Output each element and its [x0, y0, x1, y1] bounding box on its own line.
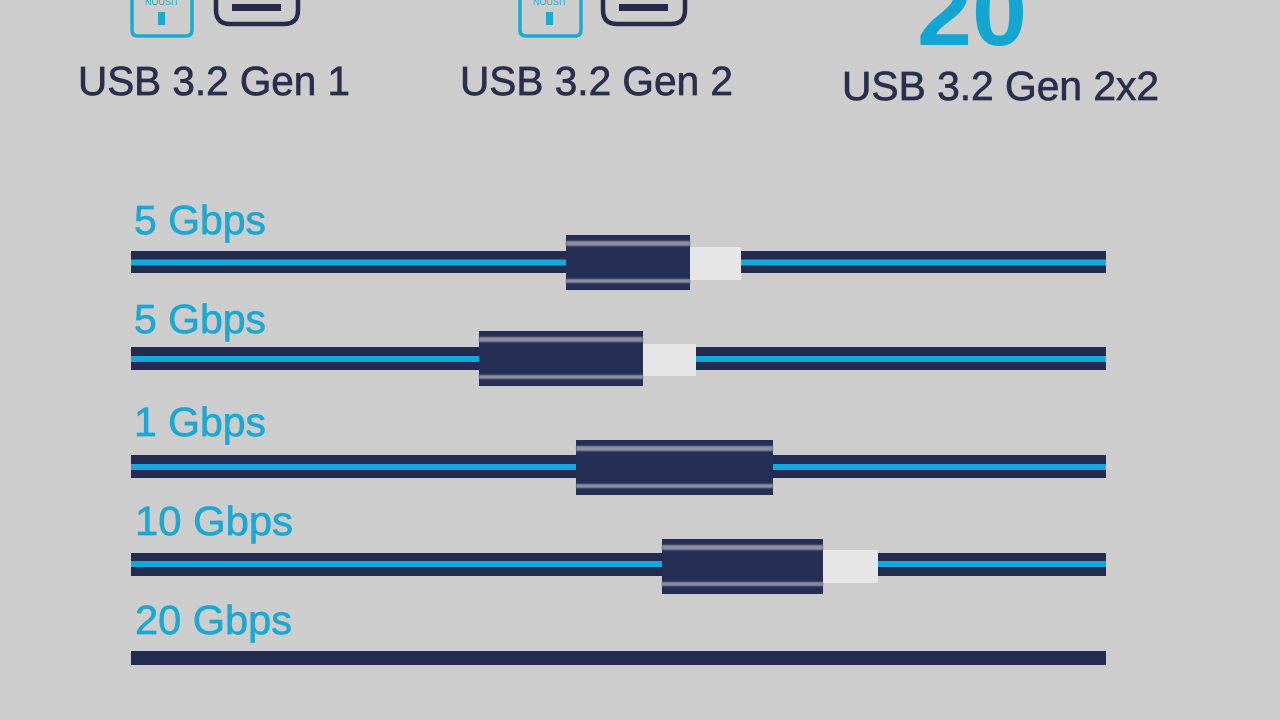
column: USB 3.2 Gen 1	[78, 0, 350, 104]
cable	[131, 651, 1106, 665]
speed label: 1 Gbps	[134, 399, 266, 445]
label: USB 3.2 Gen 1: USB 3.2 Gen 1	[78, 58, 350, 104]
cable	[131, 455, 1106, 478]
column: USB 3.2 Gen 2x2	[842, 0, 1159, 109]
speed label: 10 Gbps	[135, 498, 293, 544]
column: USB 3.2 Gen 2	[460, 0, 733, 104]
icon: USB-C port	[603, 0, 685, 24]
cable row: 1 Gbps	[131, 399, 1106, 495]
speed label: 5 Gbps	[134, 197, 266, 243]
cable row: 10 Gbps	[131, 498, 1106, 594]
icon: USB-C port	[216, 0, 298, 24]
connector	[479, 331, 696, 386]
connector	[662, 539, 878, 594]
connector	[576, 440, 773, 495]
cable row: 20 Gbps	[131, 597, 1106, 665]
label: USB 3.2 Gen 2: USB 3.2 Gen 2	[460, 58, 733, 104]
cable row: 5 Gbps	[131, 197, 1106, 290]
cable	[131, 553, 1106, 576]
cable	[131, 251, 1106, 273]
speed label: 20 Gbps	[135, 597, 292, 643]
label: USB 3.2 Gen 2x2: USB 3.2 Gen 2x2	[842, 63, 1159, 109]
icon: drive card	[132, 0, 192, 36]
icon: drive card	[520, 0, 581, 36]
cable row: 5 Gbps second	[131, 296, 1106, 386]
cable	[131, 347, 1106, 370]
connector	[566, 235, 741, 290]
speed label: 5 Gbps	[134, 296, 266, 342]
